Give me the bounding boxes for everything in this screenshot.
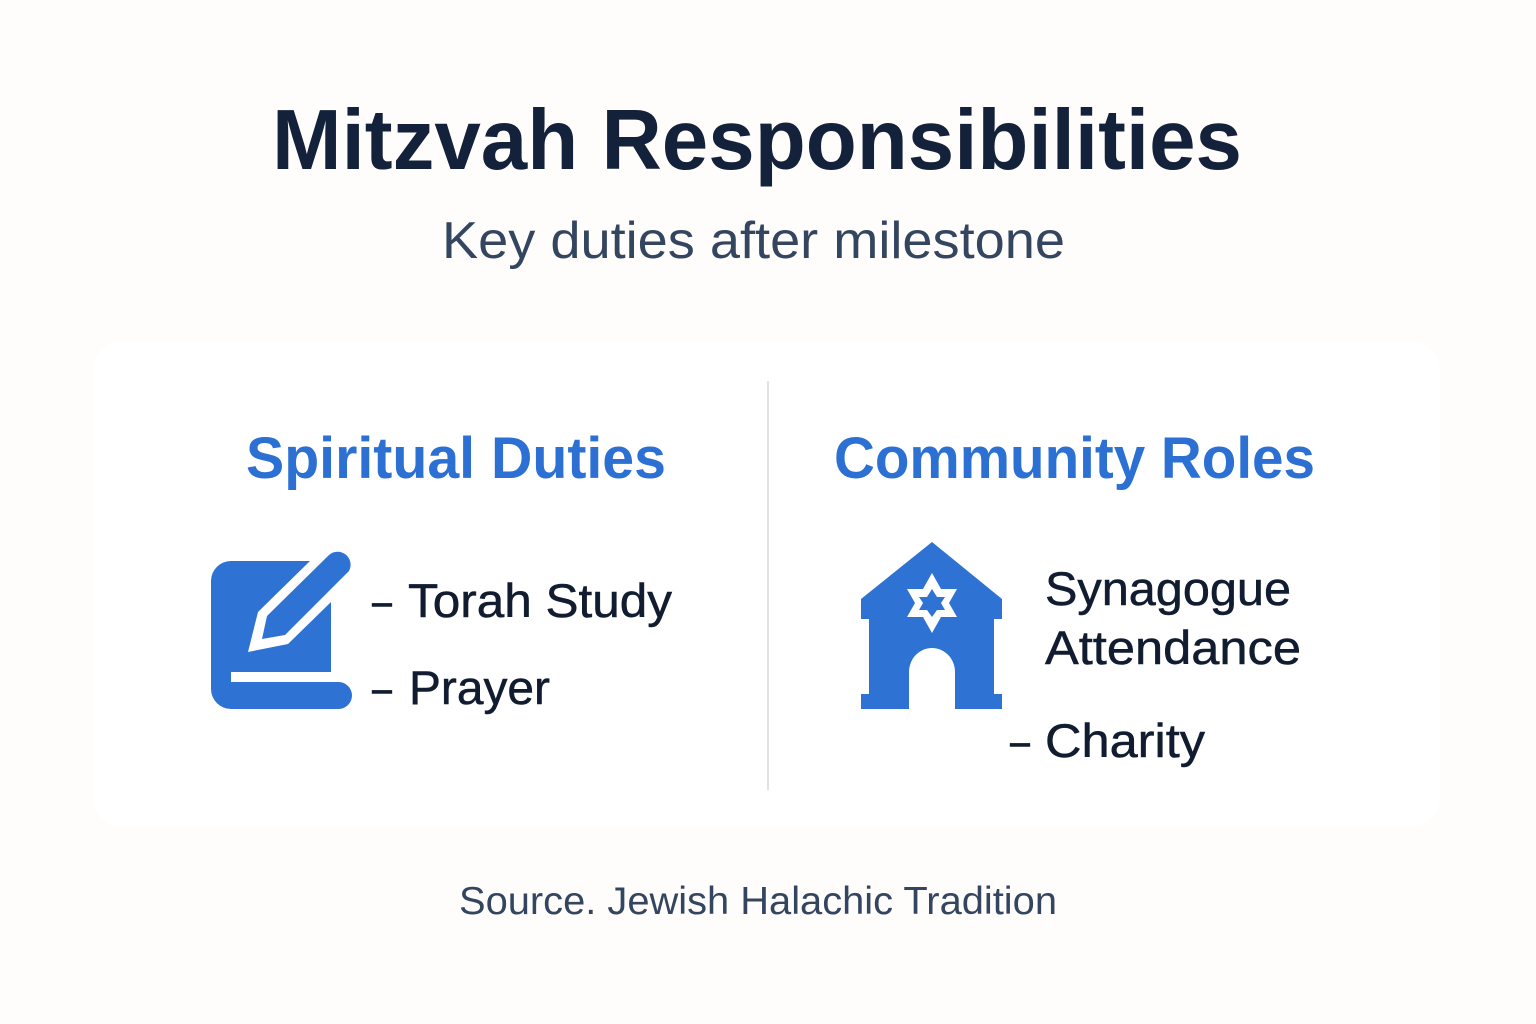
list item: Torah Study: Torah Study — [408, 574, 673, 627]
icon: synagogue — [861, 542, 1002, 709]
list item: Torah Study: – — [372, 574, 393, 627]
heading: Community Roles: Community Roles — [834, 426, 1315, 491]
title: Mitzvah Responsibilities — [272, 93, 1242, 188]
source note: Source. Jewish Halachic Tradition — [459, 880, 1057, 923]
list item: Synagogue Attendance — [1045, 562, 1301, 674]
icon: pen and paper — [211, 552, 352, 709]
panel: main card — [93, 342, 1440, 826]
list item: Charity: Charity — [1045, 714, 1206, 767]
list item: Synagogue Attendance: Attendance — [1045, 621, 1301, 674]
subtitle: Key duties after milestone — [442, 212, 1065, 270]
heading: Spiritual Duties: Spiritual Duties — [246, 426, 666, 491]
list item: Prayer: Prayer — [409, 661, 550, 714]
list item: Prayer: – — [372, 661, 393, 714]
list item: Synagogue Attendance: Synagogue — [1045, 562, 1291, 615]
list item: Charity: – — [1010, 714, 1031, 767]
